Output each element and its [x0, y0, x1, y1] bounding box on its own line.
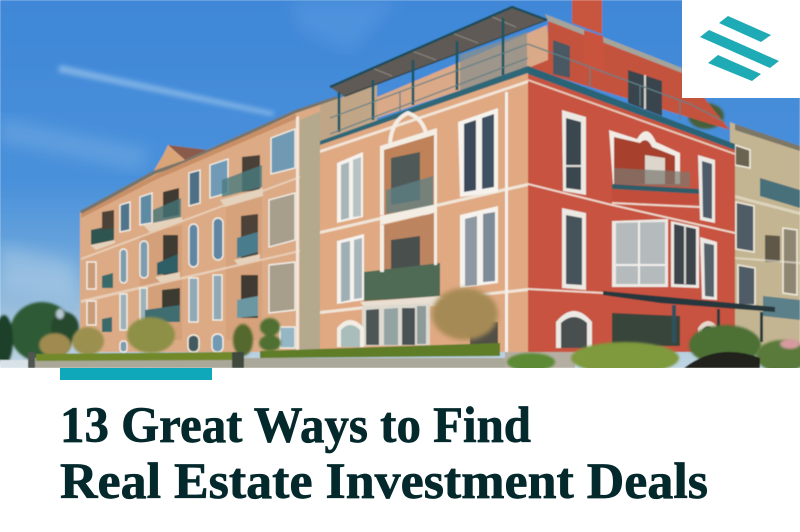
ground floor sunroom — [337, 303, 498, 347]
title: Real Estate Investment Deals — [60, 454, 708, 510]
right building — [730, 122, 800, 352]
left building balconies — [90, 155, 263, 332]
logo panel — [682, 0, 800, 98]
red facade upper balcony — [609, 130, 700, 208]
logo stripes — [700, 16, 779, 81]
left building — [80, 96, 338, 352]
hedge and retaining wall — [0, 343, 575, 368]
foreground bushes and gate — [507, 325, 800, 374]
front building peach facade — [320, 66, 528, 352]
photo: apartment buildings — [0, 0, 800, 374]
foliage behind terrace — [688, 103, 724, 129]
chimney — [572, 0, 602, 34]
left willow trees and topiary — [39, 317, 281, 357]
front building red facade — [528, 66, 775, 352]
red facade windows — [556, 110, 717, 348]
peach facade balcony alcove — [360, 113, 440, 308]
white title panel — [0, 368, 800, 532]
willow tree — [432, 288, 498, 340]
peach facade windows — [337, 108, 498, 304]
title — [60, 398, 708, 510]
sky — [0, 0, 800, 368]
left building windows — [87, 129, 295, 352]
pergola roof and top floor — [320, 0, 730, 142]
left trees — [0, 302, 79, 365]
lower pergola — [603, 291, 775, 346]
teal accent bar — [60, 368, 212, 380]
title: 13 Great Ways to Find — [60, 398, 531, 454]
